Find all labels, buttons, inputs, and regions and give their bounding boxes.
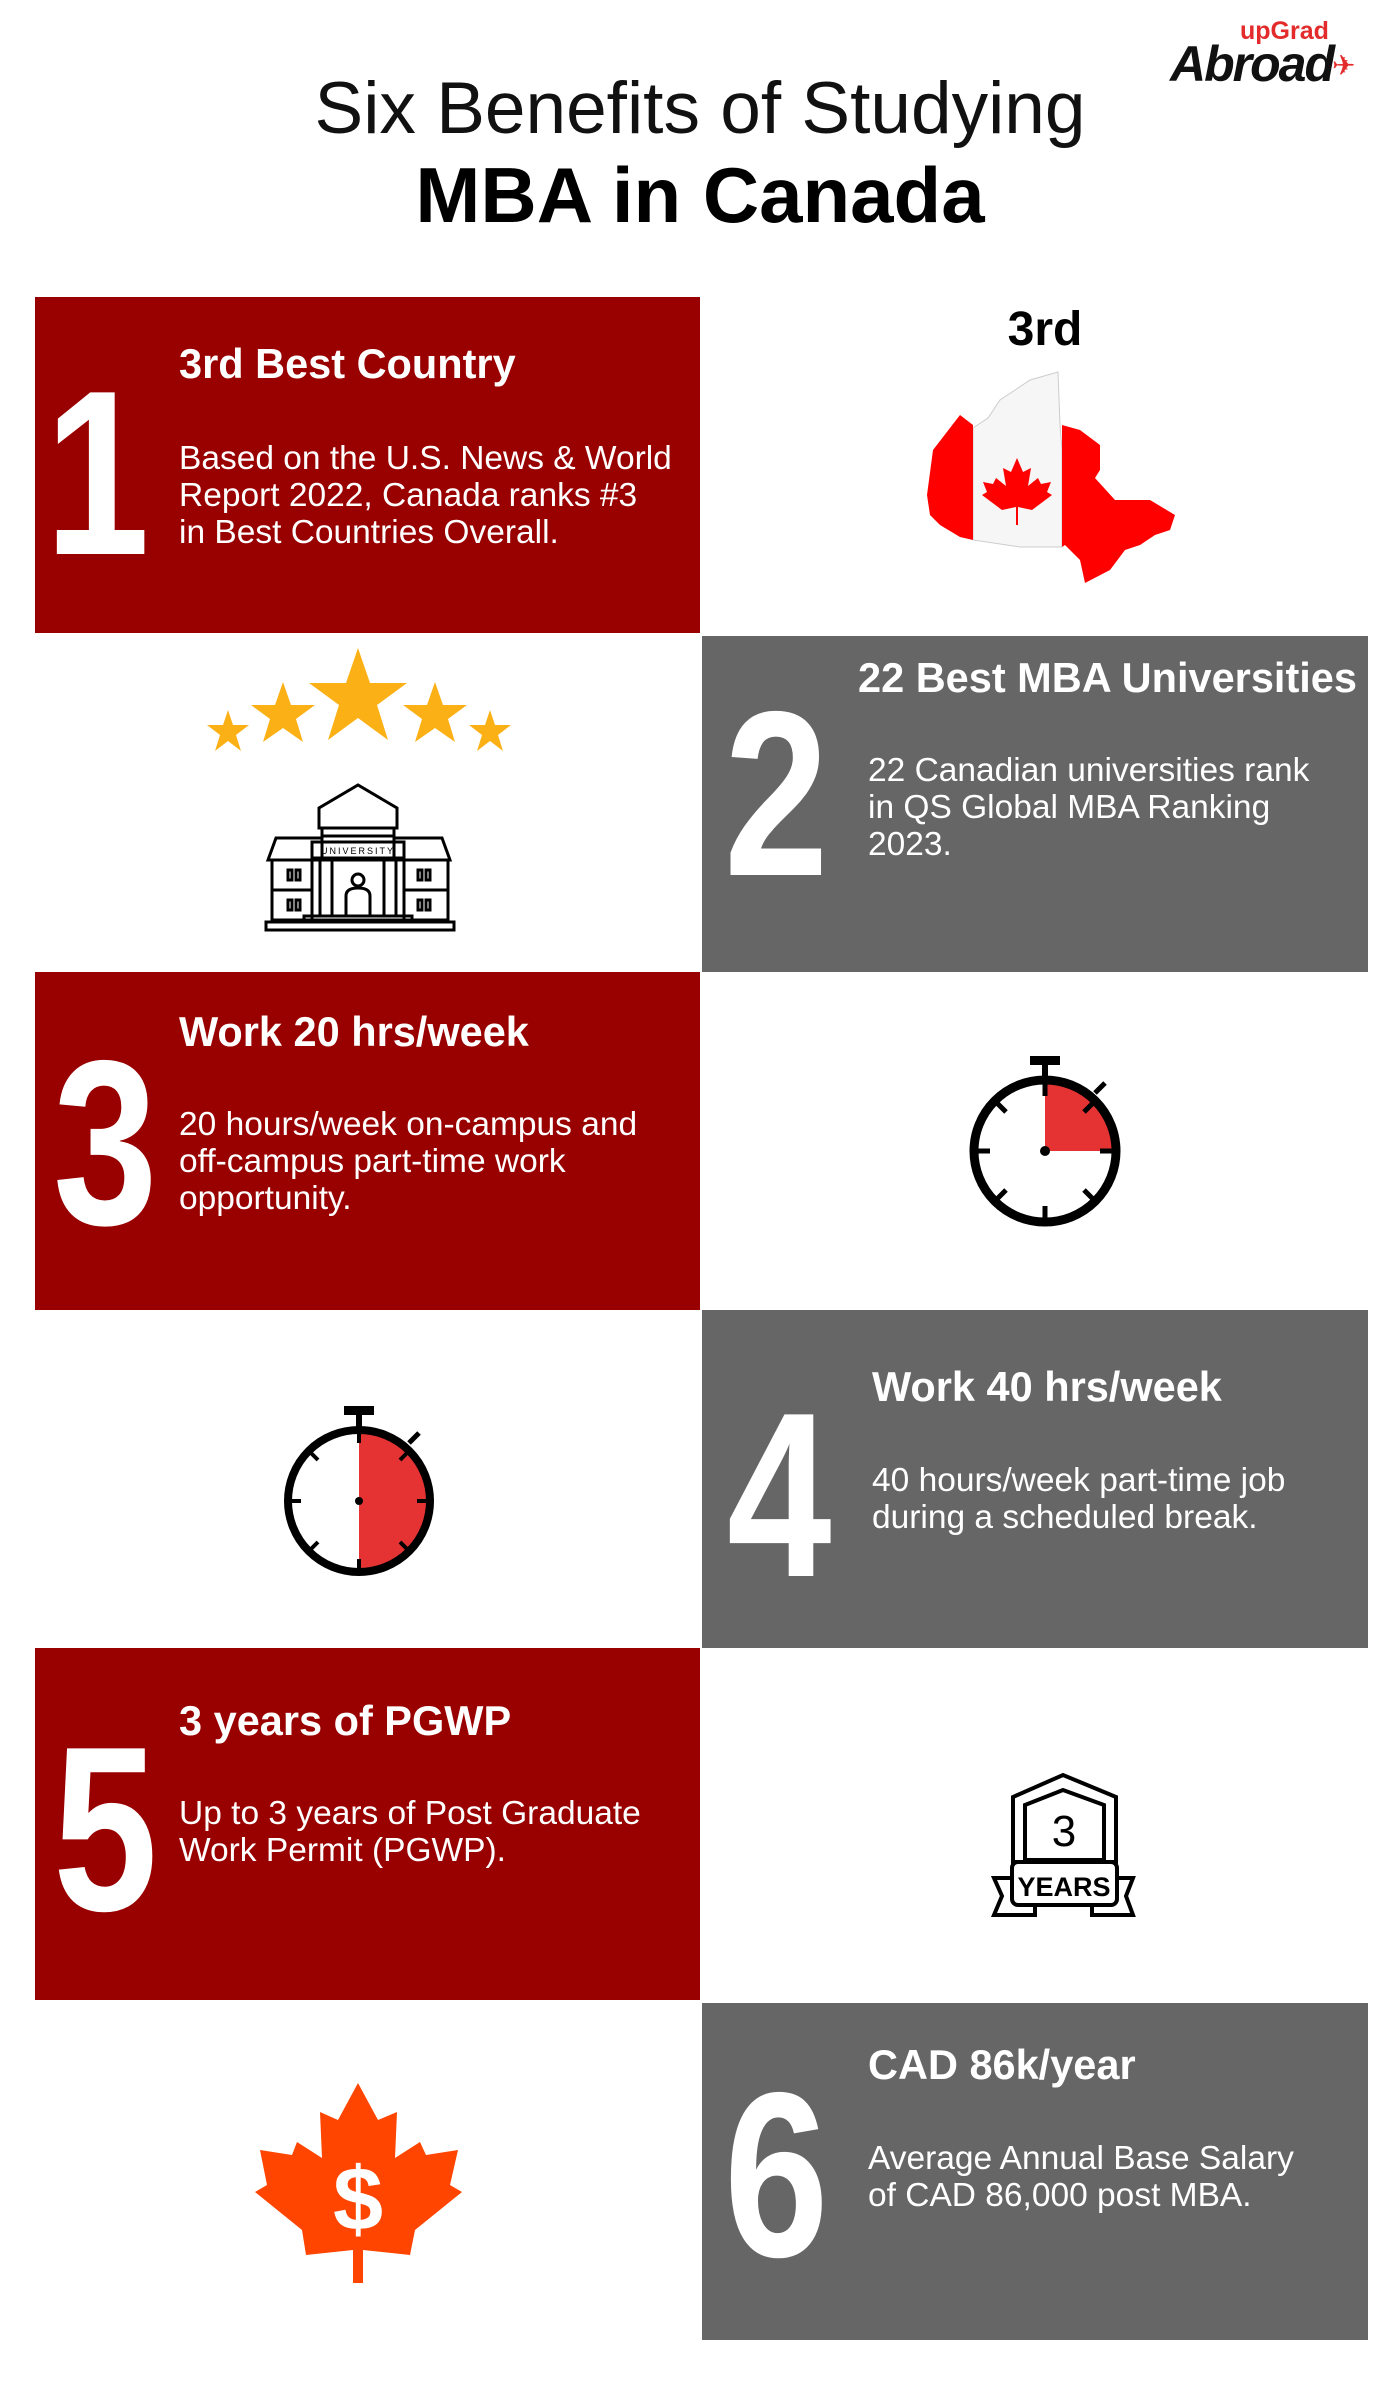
panel 4: 4 xyxy=(727,1363,832,1626)
icon: stopwatch quarter xyxy=(970,1056,1120,1226)
logo: Abroad xyxy=(1170,36,1333,92)
panel 6 xyxy=(702,2003,1368,2340)
icon: 3 years badge: 3 xyxy=(1052,1807,1076,1856)
title xyxy=(314,68,1086,239)
icon: maple leaf dollar xyxy=(255,2083,462,2283)
panel 5: 5 xyxy=(53,1697,158,1960)
panel 1: Based on the U.S. News & World xyxy=(179,440,672,477)
logo: upGrad xyxy=(1240,17,1329,45)
panel 1: Report 2022, Canada ranks #3 xyxy=(179,477,637,514)
panel 2: 2023. xyxy=(868,826,952,863)
panel 2: 2 xyxy=(724,662,829,925)
panel 5: 3 years of PGWP xyxy=(179,1697,511,1744)
panel 3: off-campus part-time work xyxy=(179,1143,566,1180)
panel 4 xyxy=(702,1310,1368,1648)
panel 4: Work 40 hrs/week xyxy=(872,1363,1222,1410)
panel 1: in Best Countries Overall. xyxy=(179,514,559,551)
panel 3: opportunity. xyxy=(179,1180,352,1217)
panel 5: Work Permit (PGWP). xyxy=(179,1832,506,1869)
panel 2: 22 Best MBA Universities xyxy=(858,654,1357,701)
3rd label: 3rd xyxy=(1008,303,1082,356)
panel 5: Up to 3 years of Post Graduate xyxy=(179,1795,641,1832)
icon: stars xyxy=(207,648,511,751)
logo: ✈ xyxy=(1332,50,1355,81)
logo xyxy=(1169,17,1355,92)
panel 3: 20 hours/week on-campus and xyxy=(179,1106,637,1143)
panel 3 xyxy=(35,972,700,1310)
panel 6: CAD 86k/year xyxy=(868,2041,1136,2088)
panel 4: during a scheduled break. xyxy=(872,1499,1258,1536)
panel 1 xyxy=(35,297,700,633)
icon: stopwatch half xyxy=(284,1406,434,1576)
panel 4: 40 hours/week part-time job xyxy=(872,1462,1285,1499)
icon: 3 years badge: YEARS xyxy=(1017,1872,1111,1902)
panel 2: 22 Canadian universities rank xyxy=(868,752,1309,789)
panel 2 xyxy=(702,636,1368,972)
panel 1: 1 xyxy=(45,341,150,604)
panel 5 xyxy=(35,1648,700,2000)
icon: 3 years badge xyxy=(991,1772,1136,1917)
icon: maple leaf dollar: $ xyxy=(333,2150,383,2250)
panel 3: Work 20 hrs/week xyxy=(179,1008,529,1055)
panel 6: Average Annual Base Salary xyxy=(868,2140,1294,2177)
panel 6: of CAD 86,000 post MBA. xyxy=(868,2177,1252,2214)
panel 6: 6 xyxy=(724,2043,829,2306)
icon: canada map xyxy=(927,372,1175,583)
panel 3: 3 xyxy=(53,1011,158,1274)
title: Six Benefits of Studying xyxy=(314,68,1086,149)
icon: university building: UNIVERSITY xyxy=(321,846,395,856)
title: MBA in Canada xyxy=(415,151,985,239)
panel 2: in QS Global MBA Ranking xyxy=(868,789,1270,826)
panel 1: 3rd Best Country xyxy=(179,340,516,387)
icon: university building xyxy=(264,783,456,932)
